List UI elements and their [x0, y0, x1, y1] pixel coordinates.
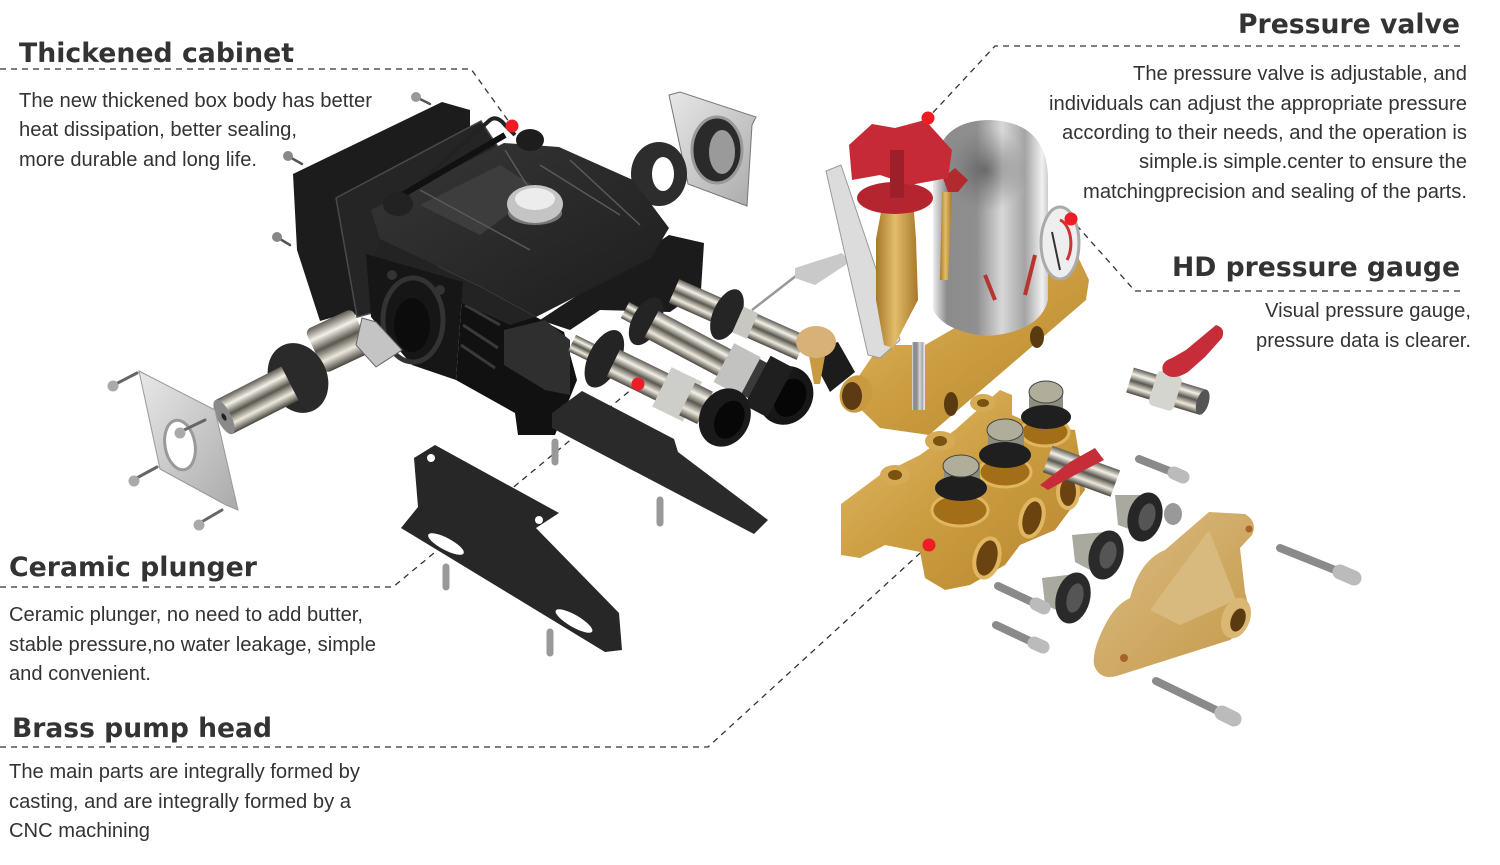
text: ceramic plunger description: stable pressure,no water leakage, simple: [9, 634, 376, 656]
heading: Pressure valve: Pressure valve: [1238, 9, 1460, 40]
black seal ring: [631, 142, 687, 206]
heading: Brass pump head: Brass pump head: [12, 713, 272, 744]
left chrome flange plate with screws: [108, 371, 238, 530]
callout marker: thickened cabinet: [506, 120, 518, 132]
text: ceramic plunger description: [9, 604, 376, 685]
heading: HD pressure gauge: HD pressure gauge: [1172, 252, 1460, 283]
dashed leader: brass pump head: [0, 545, 929, 747]
check valve 3: [1042, 568, 1096, 628]
gasket plate: [336, 121, 500, 317]
valve cartridge 3: [1021, 381, 1071, 429]
text: thickened cabinet description: heat dissipation, better sealing,: [19, 119, 297, 141]
callout marker: pressure valve: [922, 112, 934, 124]
valve cartridge 2: [979, 419, 1031, 468]
brass plug: [796, 326, 836, 384]
steel tank: [933, 120, 1048, 336]
heading: Ceramic plunger: Ceramic plunger: [9, 552, 258, 583]
text: pressure valve description: simple.is simple.center to ensure the: [1139, 151, 1467, 173]
lower casing side: [456, 282, 577, 435]
top right chrome flange: [669, 92, 756, 206]
callout marker: pressure gauge: [1064, 212, 1078, 226]
callout marker: brass pump head: [922, 538, 936, 552]
loose check valves: [1042, 488, 1182, 628]
text: pressure gauge description: [1256, 300, 1471, 352]
text: pressure valve description: individuals can adjust the appropriate pressure: [1049, 93, 1467, 115]
back cover plate: [293, 102, 470, 321]
casing end panel: [504, 320, 570, 395]
front lid band: [372, 239, 536, 325]
pump crankcase assembly: [272, 92, 756, 435]
threaded outlet: [834, 371, 878, 417]
handle rail: [395, 118, 515, 205]
black fitting behind plug: [808, 342, 855, 392]
text: thickened cabinet description: [19, 90, 372, 171]
socket head bolts: [996, 459, 1354, 719]
ball valve lower: [1040, 446, 1120, 497]
ribs: [461, 305, 500, 368]
left shaft assembly: [209, 308, 402, 437]
top plunger: [663, 266, 813, 373]
text: brass pump head description: casting, and are integrally formed by a: [9, 791, 352, 813]
long mounting bracket: [552, 391, 768, 534]
valve cartridge 1: [935, 455, 987, 501]
chrome elbow: [305, 308, 372, 374]
lid raised detail: [420, 165, 540, 235]
tank reflections: [985, 255, 1035, 300]
ball valve upper: [1125, 325, 1223, 421]
heading: Thickened cabinet: Thickened cabinet: [19, 38, 294, 69]
right side casing: [540, 235, 704, 330]
check valve 2: [1072, 526, 1129, 584]
callout marker: ceramic plunger: [632, 378, 644, 390]
front mounting bracket: [401, 445, 622, 652]
text: pressure valve description: The pressure valve is adjustable, and: [1133, 63, 1467, 85]
text: thickened cabinet description: The new thickened box body has better: [19, 90, 372, 112]
upper manifold and tank: [796, 120, 1089, 435]
black nut: [257, 333, 339, 423]
text: pressure valve description: according to their needs, and the operation is: [1062, 122, 1467, 144]
front flange: [366, 254, 463, 380]
valve seat cups: [932, 418, 1069, 526]
text: pressure gauge description: Visual pressure gauge,: [1265, 300, 1471, 322]
text: pressure gauge description: pressure data is clearer.: [1256, 330, 1471, 352]
chrome post: [912, 342, 925, 410]
brass end cover: [1094, 512, 1256, 677]
oil cap: [507, 185, 563, 225]
plungers: [558, 266, 855, 456]
lower brass pump head: [841, 381, 1120, 590]
text: ceramic plunger description: and convenient.: [9, 663, 151, 685]
red valve knob: [849, 120, 952, 214]
main lid: [371, 143, 669, 317]
text: pressure valve description: [1049, 63, 1467, 203]
dashed leader: pressure valve: [928, 46, 1460, 118]
tank dome shading: [943, 128, 1027, 212]
dashed leader: thickened cabinet: [0, 69, 512, 126]
text: brass pump head description: The main parts are integrally formed by: [9, 761, 360, 783]
thin wire and tag: [752, 253, 850, 310]
bore openings: [970, 476, 1078, 580]
middle plunger: [611, 284, 824, 435]
mounting bosses: [880, 394, 996, 485]
text: ceramic plunger description: Ceramic plunger, no need to add butter,: [9, 604, 363, 626]
bracket bolts: [446, 442, 660, 653]
bottom plunger: [558, 315, 761, 456]
text: brass pump head description: [9, 761, 360, 842]
small brass needle: [940, 192, 952, 280]
text: pressure valve description: matchingprecision and sealing of the parts.: [1083, 181, 1467, 203]
brass valve stem: [876, 212, 918, 348]
text: thickened cabinet description: more durable and long life.: [19, 149, 257, 171]
chrome shaft: [209, 366, 299, 437]
check valve 1: [1115, 488, 1182, 546]
text: brass pump head description: CNC machining: [9, 820, 150, 842]
brass manifold: [846, 257, 1089, 435]
steel lever: [826, 165, 900, 358]
small screws around back plate: [272, 92, 430, 245]
pressure gauge: [1041, 207, 1079, 279]
dashed leader: ceramic plunger: [0, 384, 638, 587]
dashed leader: pressure gauge: [1071, 219, 1460, 291]
